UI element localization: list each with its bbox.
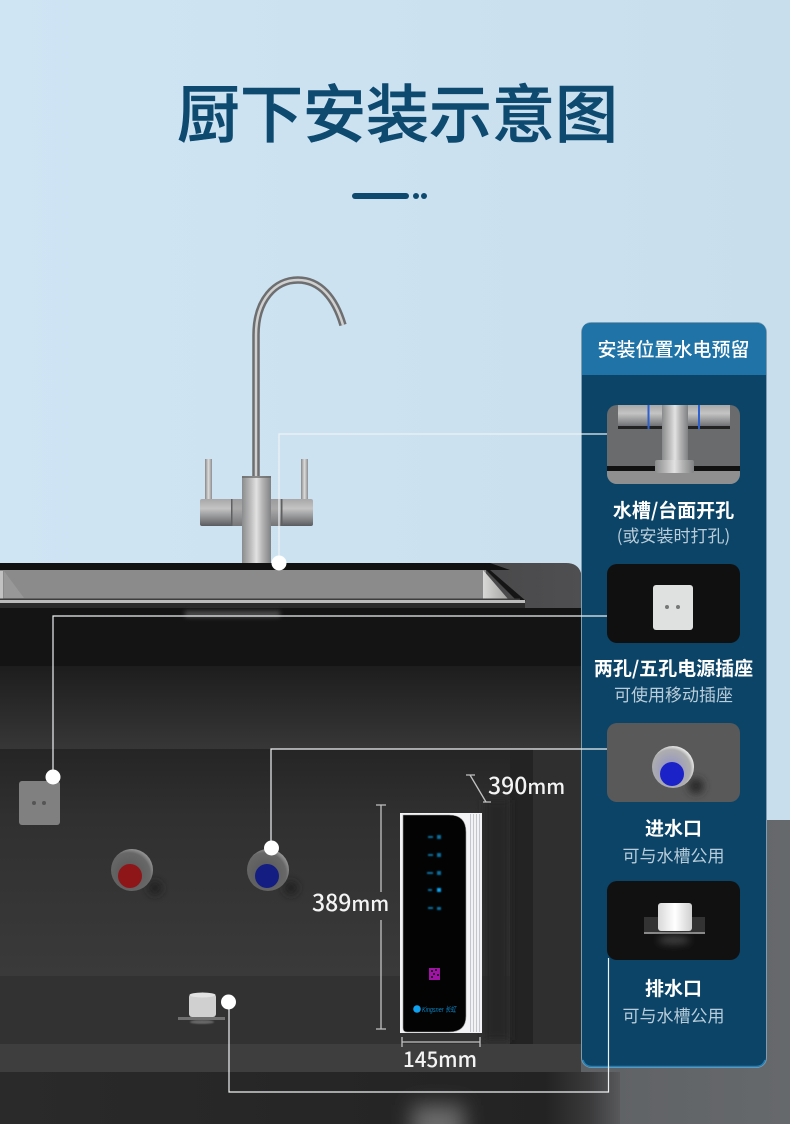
front fascia [0, 608, 581, 666]
right handle [301, 459, 308, 501]
note: power socket: 可使用移动插座 [614, 681, 733, 706]
countertop [0, 563, 581, 612]
dimension: depth 390mm: 390mm [488, 767, 565, 801]
faucet body [242, 476, 271, 563]
cabinet upper band [0, 666, 581, 750]
title: 厨下安装示意图 [177, 65, 618, 156]
water purifier unit [400, 813, 482, 1033]
purifier front panel [403, 815, 466, 1032]
panel bottom accent [583, 1060, 765, 1066]
thumbnail: countertop hole [607, 405, 740, 484]
panel header [582, 323, 766, 375]
dimension: width 145mm: 145mm [403, 1044, 477, 1074]
left handle [205, 459, 212, 501]
floor shadow [0, 1072, 620, 1124]
crossbar [200, 499, 313, 526]
thumbnail: drain [607, 881, 740, 960]
background: floor [0, 820, 790, 1124]
title divider [352, 193, 427, 199]
panel body [582, 322, 766, 1068]
sink basin [0, 570, 526, 608]
label: countertop hole: 水槽/台面开孔 [613, 496, 734, 523]
cabinet interior [0, 749, 581, 977]
cabinet illustration [0, 563, 620, 1124]
spout [256, 280, 343, 480]
thumbnail: water inlet [607, 723, 740, 802]
status indicators [427, 835, 441, 910]
dimension: height 389mm: 389mm [312, 884, 389, 918]
hot water valve [111, 849, 162, 895]
brand logo: Kingsner 长虹 [422, 1005, 457, 1014]
faucet [200, 280, 343, 563]
leader lines [53, 434, 608, 1092]
label: drain: 排水口 [645, 974, 702, 1001]
label: power socket: 两孔/五孔电源插座 [594, 654, 753, 681]
cold water valve [247, 849, 298, 895]
note: water inlet: 可与水槽公用 [622, 842, 724, 867]
thumbnail: power socket [607, 564, 740, 643]
panel: installation reservations [582, 322, 766, 1068]
drain outlet [178, 992, 225, 1024]
leader endpoint dots [46, 556, 286, 1010]
dimension: height 389mm [312, 805, 389, 1029]
label: water inlet: 进水口 [645, 814, 702, 841]
QR code [429, 968, 440, 980]
note: drain: 可与水槽公用 [622, 1002, 724, 1027]
brand logo [413, 1005, 457, 1014]
wall socket [19, 781, 60, 825]
panel heading: 安装位置水电预留 [597, 335, 750, 362]
cabinet plinth [0, 1044, 581, 1072]
note: countertop hole: (或安装时打孔) [617, 522, 730, 547]
purifier side ribs [470, 814, 480, 1032]
